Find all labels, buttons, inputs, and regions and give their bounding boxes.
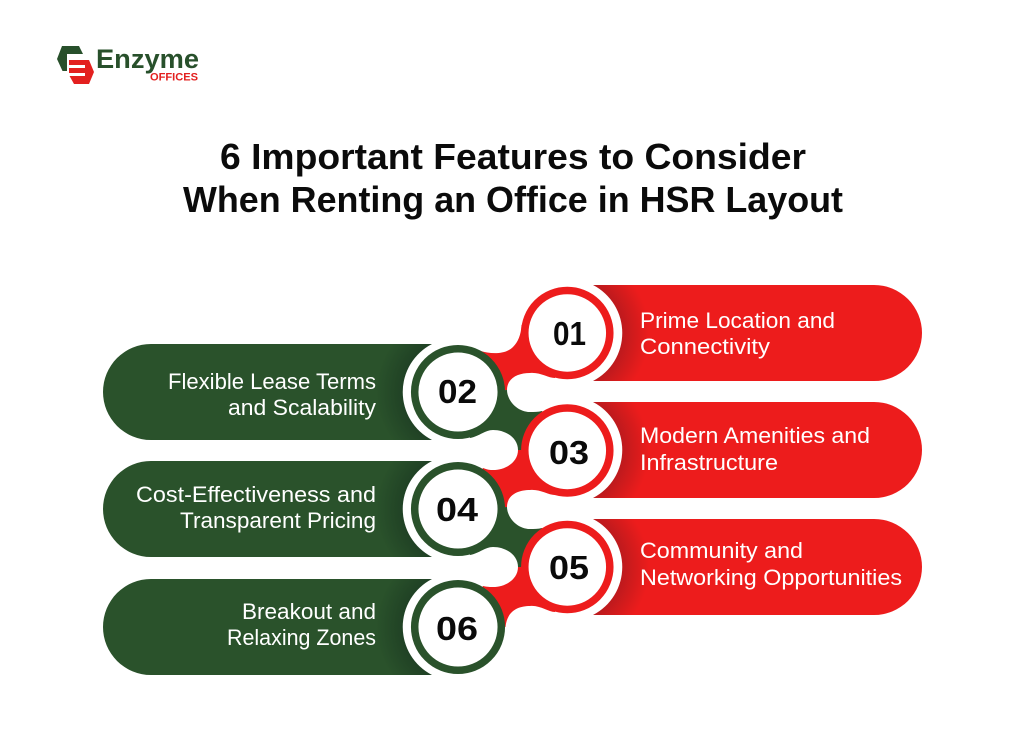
connector: 01 to 02 — [458, 325, 567, 392]
panel: 03 modern amenities — [593, 402, 922, 498]
panel: 05 community: Community and — [640, 538, 803, 563]
panel: 04 cost effectiveness: Cost-Effectiveness and — [136, 482, 376, 507]
panel: 01 prime location: Prime Location and — [640, 308, 835, 333]
panel: 04 cost effectiveness — [103, 461, 432, 557]
panel: 02 flexible lease: Flexible Lease Terms — [168, 369, 376, 394]
title: When Renting an Office in HSR Layout — [183, 179, 843, 220]
badge: 04 — [415, 466, 501, 552]
title — [183, 136, 843, 220]
badge: 03 — [525, 408, 610, 493]
icon: logo hexagon green — [57, 46, 83, 71]
panel: 02 flexible lease: and Scalability — [228, 395, 376, 420]
connector: 02 to 03 — [458, 390, 567, 450]
badge: 02: 02 — [438, 373, 477, 410]
logo subtitle: OFFICES — [150, 72, 198, 84]
connector: 03 to 04 — [458, 450, 567, 509]
badge: 05: 05 — [549, 549, 589, 586]
logo wordmark: Enzyme — [96, 44, 199, 74]
connector: 04 to 05 — [458, 507, 567, 567]
panel: 05 community — [593, 519, 922, 615]
badge: 02 — [415, 349, 501, 435]
badge: 06 — [415, 584, 501, 670]
panel: 01 prime location — [593, 285, 922, 381]
badge: 05 — [525, 524, 610, 610]
panel: 03 modern amenities: Infrastructure — [640, 450, 778, 475]
icon: logo hexagon red with E — [69, 60, 94, 84]
logo — [57, 44, 199, 84]
panel: 06 breakout zones: Relaxing Zones — [227, 625, 376, 650]
connector: 05 to 06 — [458, 567, 567, 627]
badge: 01 — [525, 290, 610, 376]
panel: 03 modern amenities: Modern Amenities and — [640, 423, 870, 448]
panel: 06 breakout zones: Breakout and — [242, 599, 376, 624]
badge: 06: 06 — [436, 610, 478, 647]
panel: 02 flexible lease — [103, 344, 432, 440]
title: 6 Important Features to Consider — [220, 136, 806, 177]
badge: 01: 01 — [553, 315, 586, 352]
panel: 04 cost effectiveness: Transparent Pricing — [180, 508, 376, 533]
panel: 01 prime location: Connectivity — [640, 334, 770, 359]
badge: 03: 03 — [549, 434, 589, 471]
panel: 05 community: Networking Opportunities — [640, 565, 902, 590]
panel: 06 breakout zones — [103, 579, 432, 675]
badge: 04: 04 — [436, 491, 479, 528]
